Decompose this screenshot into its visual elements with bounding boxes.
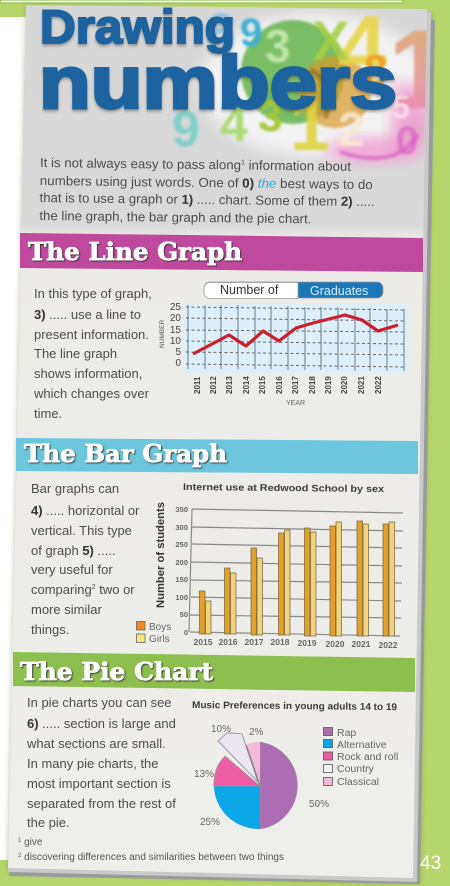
chart: number of graduates line graph: 2019 (324, 376, 333, 394)
pie chart text block: In many pie charts, the (27, 756, 159, 771)
bar graph text block: things. (31, 622, 69, 637)
chart: number of graduates line graph (159, 282, 408, 407)
bar graph text block: Bar graphs can (31, 481, 119, 496)
colourful background numbers: 9 (240, 11, 262, 55)
chart: internet use bar graph: 2016 (219, 637, 238, 647)
chart: internet use bar graph: 2018 (271, 637, 290, 647)
colourful background numbers: 1 (290, 86, 330, 166)
line graph text block: which changes over (33, 386, 150, 401)
chart: internet use bar graph (136, 482, 403, 650)
chart: number of graduates line graph: 25 (170, 302, 181, 313)
bars: girls (206, 522, 394, 636)
pie chart text block: separated from the rest of (27, 796, 176, 811)
line graph text block: present information. (34, 327, 149, 342)
footnotes: 2 (18, 853, 22, 859)
pie chart text block: most important section is (27, 776, 171, 791)
pie slices (214, 733, 297, 829)
chart title pill: Graduates (310, 284, 368, 298)
bar graph text block: 2 (92, 584, 96, 591)
legend: Rap (337, 727, 356, 739)
pie chart text block: 6) ..... section is large and (27, 716, 176, 731)
chart title: Internet use at Redwood School by sex (183, 482, 385, 495)
legend: Girls (149, 634, 170, 645)
chart: internet use bar graph: 2020 (326, 639, 345, 649)
intro text (39, 155, 375, 227)
bars: boys (200, 521, 388, 636)
pie chart text block: the pie. (27, 815, 70, 830)
chart: internet use bar graph: 2015 (194, 637, 213, 647)
chart: internet use bar graph: 250 (175, 540, 188, 549)
panel: the bar graph heading: The Bar Graph (24, 439, 227, 468)
legend: Classical (337, 776, 379, 788)
chart: number of graduates line graph: 2015 (258, 376, 267, 394)
chart: internet use bar graph: 2022 (379, 640, 398, 650)
line graph text block: time. (34, 406, 62, 421)
bar graph text block: very useful for (31, 562, 113, 577)
intro text: It is not always easy to pass along (40, 155, 237, 172)
chart title: Music Preferences in young adults 14 to 19 (192, 700, 398, 713)
chart: music preferences pie chart (192, 700, 398, 829)
chart: internet use bar graph: 0 (184, 628, 188, 637)
chart title pill: Number of (220, 283, 279, 297)
chart: number of graduates line graph: 2020 (340, 376, 349, 394)
chart: number of graduates line graph: NUMBER (159, 320, 166, 348)
pie chart text block (26, 695, 176, 830)
chart: number of graduates line graph: 2014 (242, 376, 251, 394)
chart: number of graduates line graph: 0 (175, 358, 181, 369)
intro text: that is to use a graph or 1) ..... chart. Some of them 2) ..... (40, 190, 375, 209)
chart: number of graduates line graph: 2016 (275, 376, 284, 394)
chart: number of graduates line graph: 2013 (225, 376, 234, 394)
colourful background numbers: 3 (265, 20, 291, 72)
chart: number of graduates line graph: 10 (170, 336, 181, 347)
bar graph text block: more similar (31, 602, 102, 617)
bar graph text block (31, 481, 140, 637)
chart: internet use bar graph: 50 (180, 610, 188, 619)
colourful background numbers: 9 (172, 101, 200, 157)
line graph text block (33, 286, 152, 421)
panel: the line graph heading (20, 233, 423, 272)
intro text: the line graph, the bar graph and the pie chart. (39, 208, 311, 226)
line graph text block: 3) ..... use a line to (34, 307, 141, 322)
colourful background numbers: 5 (392, 89, 410, 125)
colourful background numbers: 4 (220, 96, 248, 152)
chart: internet use bar graph: 2017 (245, 637, 264, 647)
chart title pill (204, 282, 383, 298)
legend: Alternative (337, 739, 387, 751)
legend (136, 622, 171, 645)
colourful background numbers: 6 (205, 1, 236, 64)
line graph text block: shows information, (34, 366, 142, 381)
chart: internet use bar graph: 200 (175, 558, 188, 567)
colourful background numbers: 3 (258, 92, 282, 141)
chart: internet use bar graph: 2019 (298, 638, 317, 648)
colourful background numbers: 0 (396, 119, 418, 163)
chart: number of graduates line graph: 5 (175, 347, 181, 358)
intro text: 1 (241, 159, 245, 167)
chart: number of graduates line graph: 2022 (374, 376, 383, 394)
legend: Country (337, 763, 375, 775)
bar graph text block: two or (96, 582, 135, 597)
bar graph text block: 4) ..... horizontal or (31, 503, 140, 518)
bar graph text block: vertical. This type (31, 523, 132, 538)
legend (324, 727, 398, 788)
panel: the bar graph heading (16, 438, 418, 474)
chart: internet use bar graph: 2021 (352, 639, 371, 649)
chart: number of graduates line graph: 15 (170, 325, 181, 336)
line graph text block: In this type of graph, (34, 286, 152, 301)
chart: number of graduates line graph: 2011 (193, 376, 202, 394)
footnotes (18, 837, 284, 863)
pie chart text block: what sections are small. (26, 736, 166, 751)
panel: the pie chart heading (13, 652, 415, 692)
footnotes: 1 (18, 838, 22, 844)
chart: music preferences pie chart: 10% (211, 724, 231, 735)
bar graph text block: comparing (31, 582, 92, 597)
title: numbers (39, 41, 397, 124)
footnotes: discovering differences and similarities between two things (21, 852, 284, 863)
panel: the line graph heading: The Line Graph (28, 237, 242, 266)
chart: music preferences pie chart: 13% (194, 769, 214, 780)
chart: internet use bar graph: 150 (175, 575, 188, 584)
chart: internet use bar graph: 350 (175, 505, 188, 514)
colourful background numbers: 8 (364, 46, 387, 93)
footnotes: give (21, 837, 43, 848)
chart: internet use bar graph: 100 (175, 593, 188, 602)
colourful background numbers (172, 10, 427, 168)
bar graph text block: of graph 5) ..... (31, 543, 116, 558)
panel: the pie chart heading: The Pie Chart (20, 657, 213, 686)
intro text: information about (245, 158, 351, 174)
chart: music preferences pie chart: 25% (200, 817, 220, 828)
pie chart text block: In pie charts you can see (27, 695, 172, 710)
chart: number of graduates line graph: 2018 (308, 376, 317, 394)
colourful background numbers: 1 (388, 7, 450, 132)
colourful background numbers: 2 (338, 104, 365, 157)
legend: Boys (149, 622, 171, 633)
page number: 43 (420, 853, 441, 874)
chart: number of graduates line graph: 20 (170, 313, 181, 324)
title: Drawing (40, 0, 235, 53)
chart: number of graduates line graph: YEAR (286, 400, 305, 407)
title (39, 0, 397, 124)
chart: number of graduates line graph: 2021 (357, 376, 366, 394)
chart: internet use bar graph: Number of students (155, 502, 167, 608)
chart: internet use bar graph: 300 (175, 523, 188, 532)
chart: number of graduates line graph: 2017 (291, 376, 300, 394)
legend: Rock and roll (337, 751, 398, 763)
intro text: numbers using just words. One of 0) the best ways to do (40, 173, 373, 192)
chart: music preferences pie chart: 2% (249, 727, 264, 738)
chart: music preferences pie chart: 50% (309, 799, 329, 810)
line graph text block: The line graph (34, 346, 117, 361)
chart: number of graduates line graph: 2012 (209, 376, 218, 394)
colourful background numbers: X (312, 9, 349, 72)
